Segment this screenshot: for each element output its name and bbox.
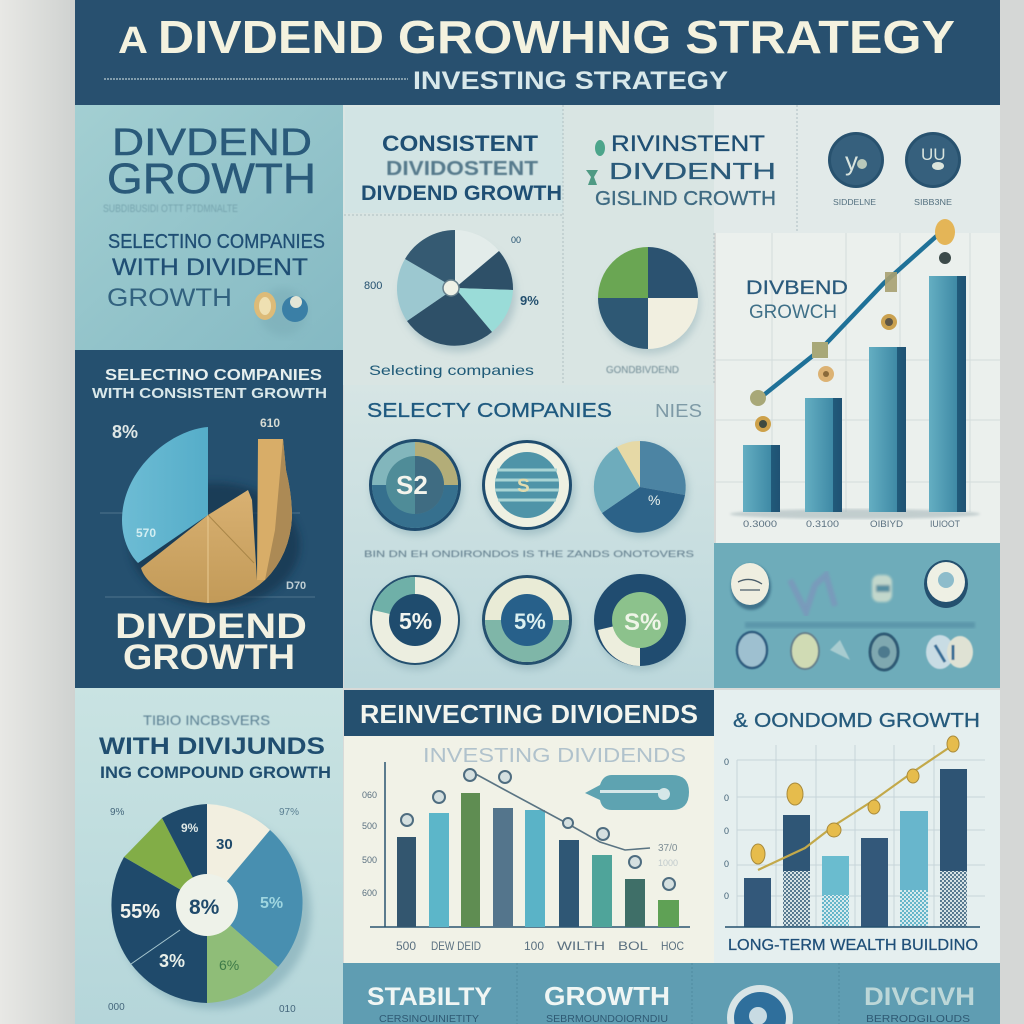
banner heading — [344, 690, 714, 736]
panel: consistent dividend growth: DIVDEND GROWTH — [361, 182, 562, 205]
y labels: 0 — [724, 891, 729, 901]
panel caption: DIVDEND — [115, 607, 307, 646]
y labels: 0 — [724, 757, 729, 767]
panel heading: SELECTINO COMPANIES — [105, 367, 322, 384]
footer: dividend: DIVCIVH — [864, 983, 975, 1011]
icon: face badge — [924, 560, 968, 608]
bar labels: IUIOOT — [930, 519, 960, 529]
corner labels: 9% — [110, 807, 125, 818]
pie chart — [111, 804, 311, 1009]
caption: LONG-TERM WEALTH BUILDINO — [728, 937, 978, 954]
pie chart: selecting companies: 9% — [520, 293, 539, 308]
icon: ring 5% three: S% — [624, 609, 661, 636]
callout pill — [585, 775, 689, 810]
panel: consistent growth dark: 610 — [260, 416, 280, 430]
pie chart: 9% — [181, 821, 199, 835]
pie chart — [122, 427, 300, 607]
pie chart: 5% — [260, 895, 283, 912]
markers — [751, 736, 959, 864]
chart title: DIVBEND — [746, 278, 848, 299]
bars — [730, 276, 980, 519]
pie: three segments: % — [648, 492, 660, 508]
pie chart: selecting companies: 00 — [511, 235, 521, 245]
panel: reinvest dividend growth: DIVDENTH — [609, 158, 776, 184]
markers — [750, 219, 955, 432]
icon: ring 5% two — [482, 575, 575, 670]
pie chart: 8% — [189, 896, 220, 919]
pie chart: 3% — [159, 951, 185, 971]
panel heading: WITH DIVIJUNDS — [99, 733, 325, 760]
panel: consistent growth dark: WITH CONSISTENT GROWTH — [92, 385, 327, 402]
axis — [725, 926, 980, 928]
markers — [401, 769, 675, 890]
panel: compound growth pie: 97% — [279, 807, 299, 818]
icon: cream badge — [731, 563, 771, 610]
trend line — [472, 772, 650, 850]
panel: top middle background — [343, 105, 714, 385]
axes — [370, 762, 690, 927]
panel: reinvest dividend growth — [586, 131, 776, 210]
panel: reinvesting dividends — [344, 690, 714, 963]
grid — [737, 745, 985, 927]
bar labels: 0.3100 — [806, 519, 839, 529]
panel: consistent dividend growth: DIVIDOSTENT — [386, 158, 538, 180]
y labels: 0 — [724, 859, 729, 869]
x labels: HOC — [661, 939, 684, 953]
panel: dividend growth bar chart — [716, 219, 1000, 543]
panel: icon strip — [714, 543, 1000, 688]
panel: selecty companies: NIES — [655, 401, 702, 421]
pie chart: 30 — [216, 836, 233, 853]
trend line — [760, 233, 940, 398]
y labels: 500 — [362, 821, 377, 831]
panel: reinvesting dividends: REINVECTING DIVIOENDS — [360, 699, 698, 729]
panel: dividend growth intro: GROWTH — [107, 155, 316, 203]
panel: long-term wealth building — [714, 690, 1000, 963]
icon: footer coin — [727, 985, 793, 1024]
label: SIDDELNE — [833, 198, 876, 207]
y labels: 060 — [362, 790, 377, 800]
right margin — [1000, 0, 1024, 1024]
panel: top right background — [714, 105, 1000, 233]
icon: ring 5% one — [370, 575, 463, 670]
icon: striped coin — [482, 440, 575, 535]
icon: leaf — [595, 140, 605, 156]
selecting companies text: SELECTINO COMPANIES — [108, 231, 325, 253]
title: A DIVDEND GROWHNG STRATEGY — [118, 11, 955, 63]
footer dividers — [517, 963, 839, 1024]
y labels: 600 — [362, 888, 377, 898]
header banner — [75, 0, 1000, 105]
percent label: 8% — [112, 422, 138, 442]
blurred small heading: TIBIO INCBSVERS — [143, 712, 270, 728]
grid — [716, 233, 1000, 512]
subtitle: INVESTING STRATEGY — [413, 67, 728, 95]
panel: consistent growth dark: 570 — [136, 526, 156, 540]
panel: consistent growth dark: D70 — [286, 580, 306, 592]
icon: striped coin: S — [517, 476, 530, 497]
chart title: INVESTING DIVIDENDS — [423, 745, 686, 767]
icon: coins — [254, 288, 308, 336]
icon row: bottom badges — [737, 632, 973, 670]
bar labels — [743, 519, 960, 529]
faint labels: 37/0 — [658, 843, 678, 854]
pie chart: selecting companies — [364, 230, 539, 352]
panel: selecty companies — [344, 385, 714, 688]
y labels — [362, 790, 377, 898]
panel heading: DIVDEND — [112, 122, 312, 164]
x labels: 100 — [524, 939, 544, 953]
panel: dividend growth intro: GROWTH — [107, 284, 232, 312]
icon: coin two: UU — [921, 145, 946, 164]
caption: selecting companies: Selecting companies — [369, 362, 534, 378]
heading: SELECTY COMPANIES — [367, 400, 612, 422]
y labels: 0 — [724, 793, 729, 803]
panel: compound growth pie: ING COMPOUND GROWTH — [100, 763, 331, 782]
blurred caption: GONDBIVDEND — [606, 365, 679, 376]
chart heading: & OONDOMD GROWTH — [733, 710, 980, 732]
panel dividers — [344, 105, 797, 385]
x labels: 500 — [396, 939, 416, 953]
icon: coin one: y — [845, 146, 858, 176]
x labels: BOL — [618, 939, 648, 953]
icon: ring 5% two: 5% — [514, 609, 546, 634]
gold trend line — [758, 745, 953, 870]
bar labels: 0.3000 — [743, 519, 777, 529]
heading: RIVINSTENT — [611, 131, 765, 156]
y labels: 500 — [362, 855, 377, 865]
subtitle rule — [104, 78, 408, 80]
bars — [744, 769, 967, 927]
icon: ring S2: S2 — [396, 470, 428, 500]
icon: ring S2 — [369, 439, 463, 535]
panel: reinvest dividend growth: GISLIND CROWTH — [595, 188, 776, 210]
icon: plant — [586, 170, 598, 185]
bar labels: OIBIYD — [870, 519, 904, 529]
icon: blurred glyphs — [790, 575, 892, 612]
panel: compound growth pie: 010 — [279, 1004, 296, 1015]
label: SIBB3NE — [914, 198, 952, 207]
panel: dividend growth intro: WITH DIVIDENT — [112, 254, 308, 281]
icon: ring 5% one: 5% — [399, 608, 432, 634]
pie: three segments — [594, 441, 688, 537]
panel: compound growth pie: 000 — [108, 1002, 125, 1013]
pie labels: 55% — [120, 901, 160, 923]
heading: CONSISTENT — [382, 131, 539, 156]
chart background — [344, 736, 714, 963]
footer: growth: GROWTH — [544, 981, 670, 1011]
blurred subtitle: SUBDIBUSIDI OTTT PTDMNALTE — [103, 203, 238, 215]
panel: consistent growth dark — [75, 350, 343, 688]
panel: consistent dividend growth — [345, 107, 563, 213]
icon: ring 5% three — [594, 574, 688, 670]
x labels: WILTH — [557, 939, 605, 953]
x labels — [396, 939, 684, 953]
left margin — [0, 0, 75, 1024]
panel: consistent growth dark: GROWTH — [123, 638, 295, 677]
panel: icon coins — [828, 132, 961, 207]
panel: reinvesting dividends: 1000 — [658, 858, 678, 868]
x labels: DEW DEID — [431, 939, 481, 953]
pie labels: 800 — [364, 280, 382, 292]
footer band — [343, 963, 1000, 1024]
chart guide lines — [100, 513, 315, 597]
bars — [397, 793, 679, 927]
panel: dividend growth bar chart: GROWCH — [749, 302, 837, 323]
blurred caption line: BIN DN EH ONDIRONDOS IS THE ZANDS ONOTOVERS — [364, 549, 694, 559]
y labels — [724, 757, 729, 901]
pie chart: four segments — [598, 247, 700, 354]
footer: stability: STABILTY — [367, 983, 492, 1011]
y labels: 0 — [724, 826, 729, 836]
panel: dividend growth intro — [75, 105, 343, 350]
panel: compound growth pie — [75, 688, 343, 1024]
pie chart: 6% — [219, 957, 239, 973]
